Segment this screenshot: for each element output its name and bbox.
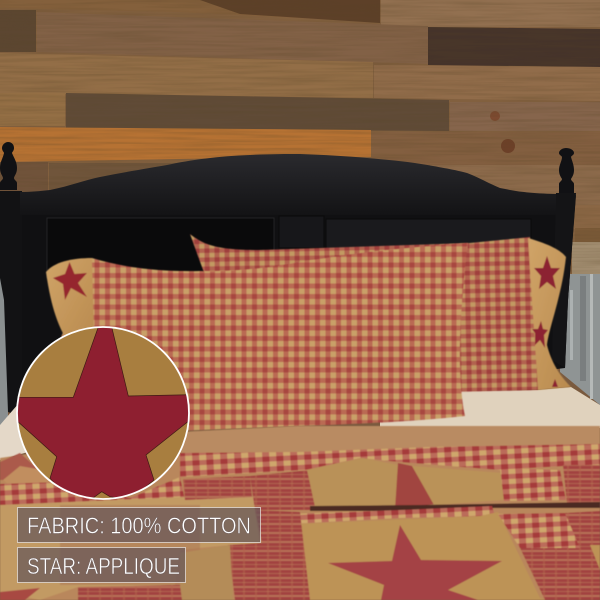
quilt xyxy=(0,426,600,600)
left post xyxy=(0,191,22,412)
right post xyxy=(552,193,576,368)
front pillow cuff xyxy=(46,258,94,345)
star on quilt xyxy=(328,525,502,600)
plaid bottom xyxy=(78,585,182,600)
corrugated metal panel xyxy=(0,270,600,425)
tan patch fold 1 xyxy=(307,458,398,510)
plaid patch fold xyxy=(563,465,600,503)
red plaid block xyxy=(228,510,310,600)
callout: star detail circle xyxy=(16,327,190,500)
check patch right xyxy=(498,513,580,548)
headboard crown rail xyxy=(20,154,556,215)
tan patch lower xyxy=(180,545,233,600)
muted cloth under labels xyxy=(60,505,200,585)
panel left xyxy=(47,218,274,278)
quilt ruffle band xyxy=(180,426,600,453)
tan patch fold 2 xyxy=(412,466,504,505)
tan patch left xyxy=(0,497,260,600)
lower check strip xyxy=(290,506,495,524)
plaid patch right xyxy=(520,548,600,600)
panel centre xyxy=(279,216,324,248)
back pillow xyxy=(190,234,571,392)
icon: left post finial xyxy=(0,142,17,190)
label: fabric xyxy=(18,508,260,542)
black headboard xyxy=(0,142,576,430)
label: fabric: FABRIC: 100% COTTON xyxy=(27,512,251,538)
bed sheet xyxy=(0,387,600,460)
wood plank wall xyxy=(0,0,600,280)
red plaid patch upper xyxy=(250,470,317,510)
plaid patch upper xyxy=(183,476,252,500)
back pillow cuff xyxy=(528,238,571,390)
panel right xyxy=(326,219,531,249)
icon: cuff star small xyxy=(532,321,548,348)
shadow seam xyxy=(310,502,600,511)
check patch fold xyxy=(500,468,566,501)
front pillow xyxy=(46,243,468,432)
icon: front cuff star xyxy=(53,262,87,300)
label: star xyxy=(18,548,186,582)
label: star: STAR: APPLIQUE xyxy=(27,553,180,579)
icon: cuff star large xyxy=(534,256,560,289)
icon: right post finial xyxy=(559,148,574,193)
icon: cuff star bottom xyxy=(552,379,558,387)
quilt left fold xyxy=(0,453,50,480)
icon: applique star xyxy=(16,327,190,500)
red star fragment fold xyxy=(395,463,434,510)
tan star block xyxy=(295,512,545,600)
quilt check fold xyxy=(180,444,600,477)
